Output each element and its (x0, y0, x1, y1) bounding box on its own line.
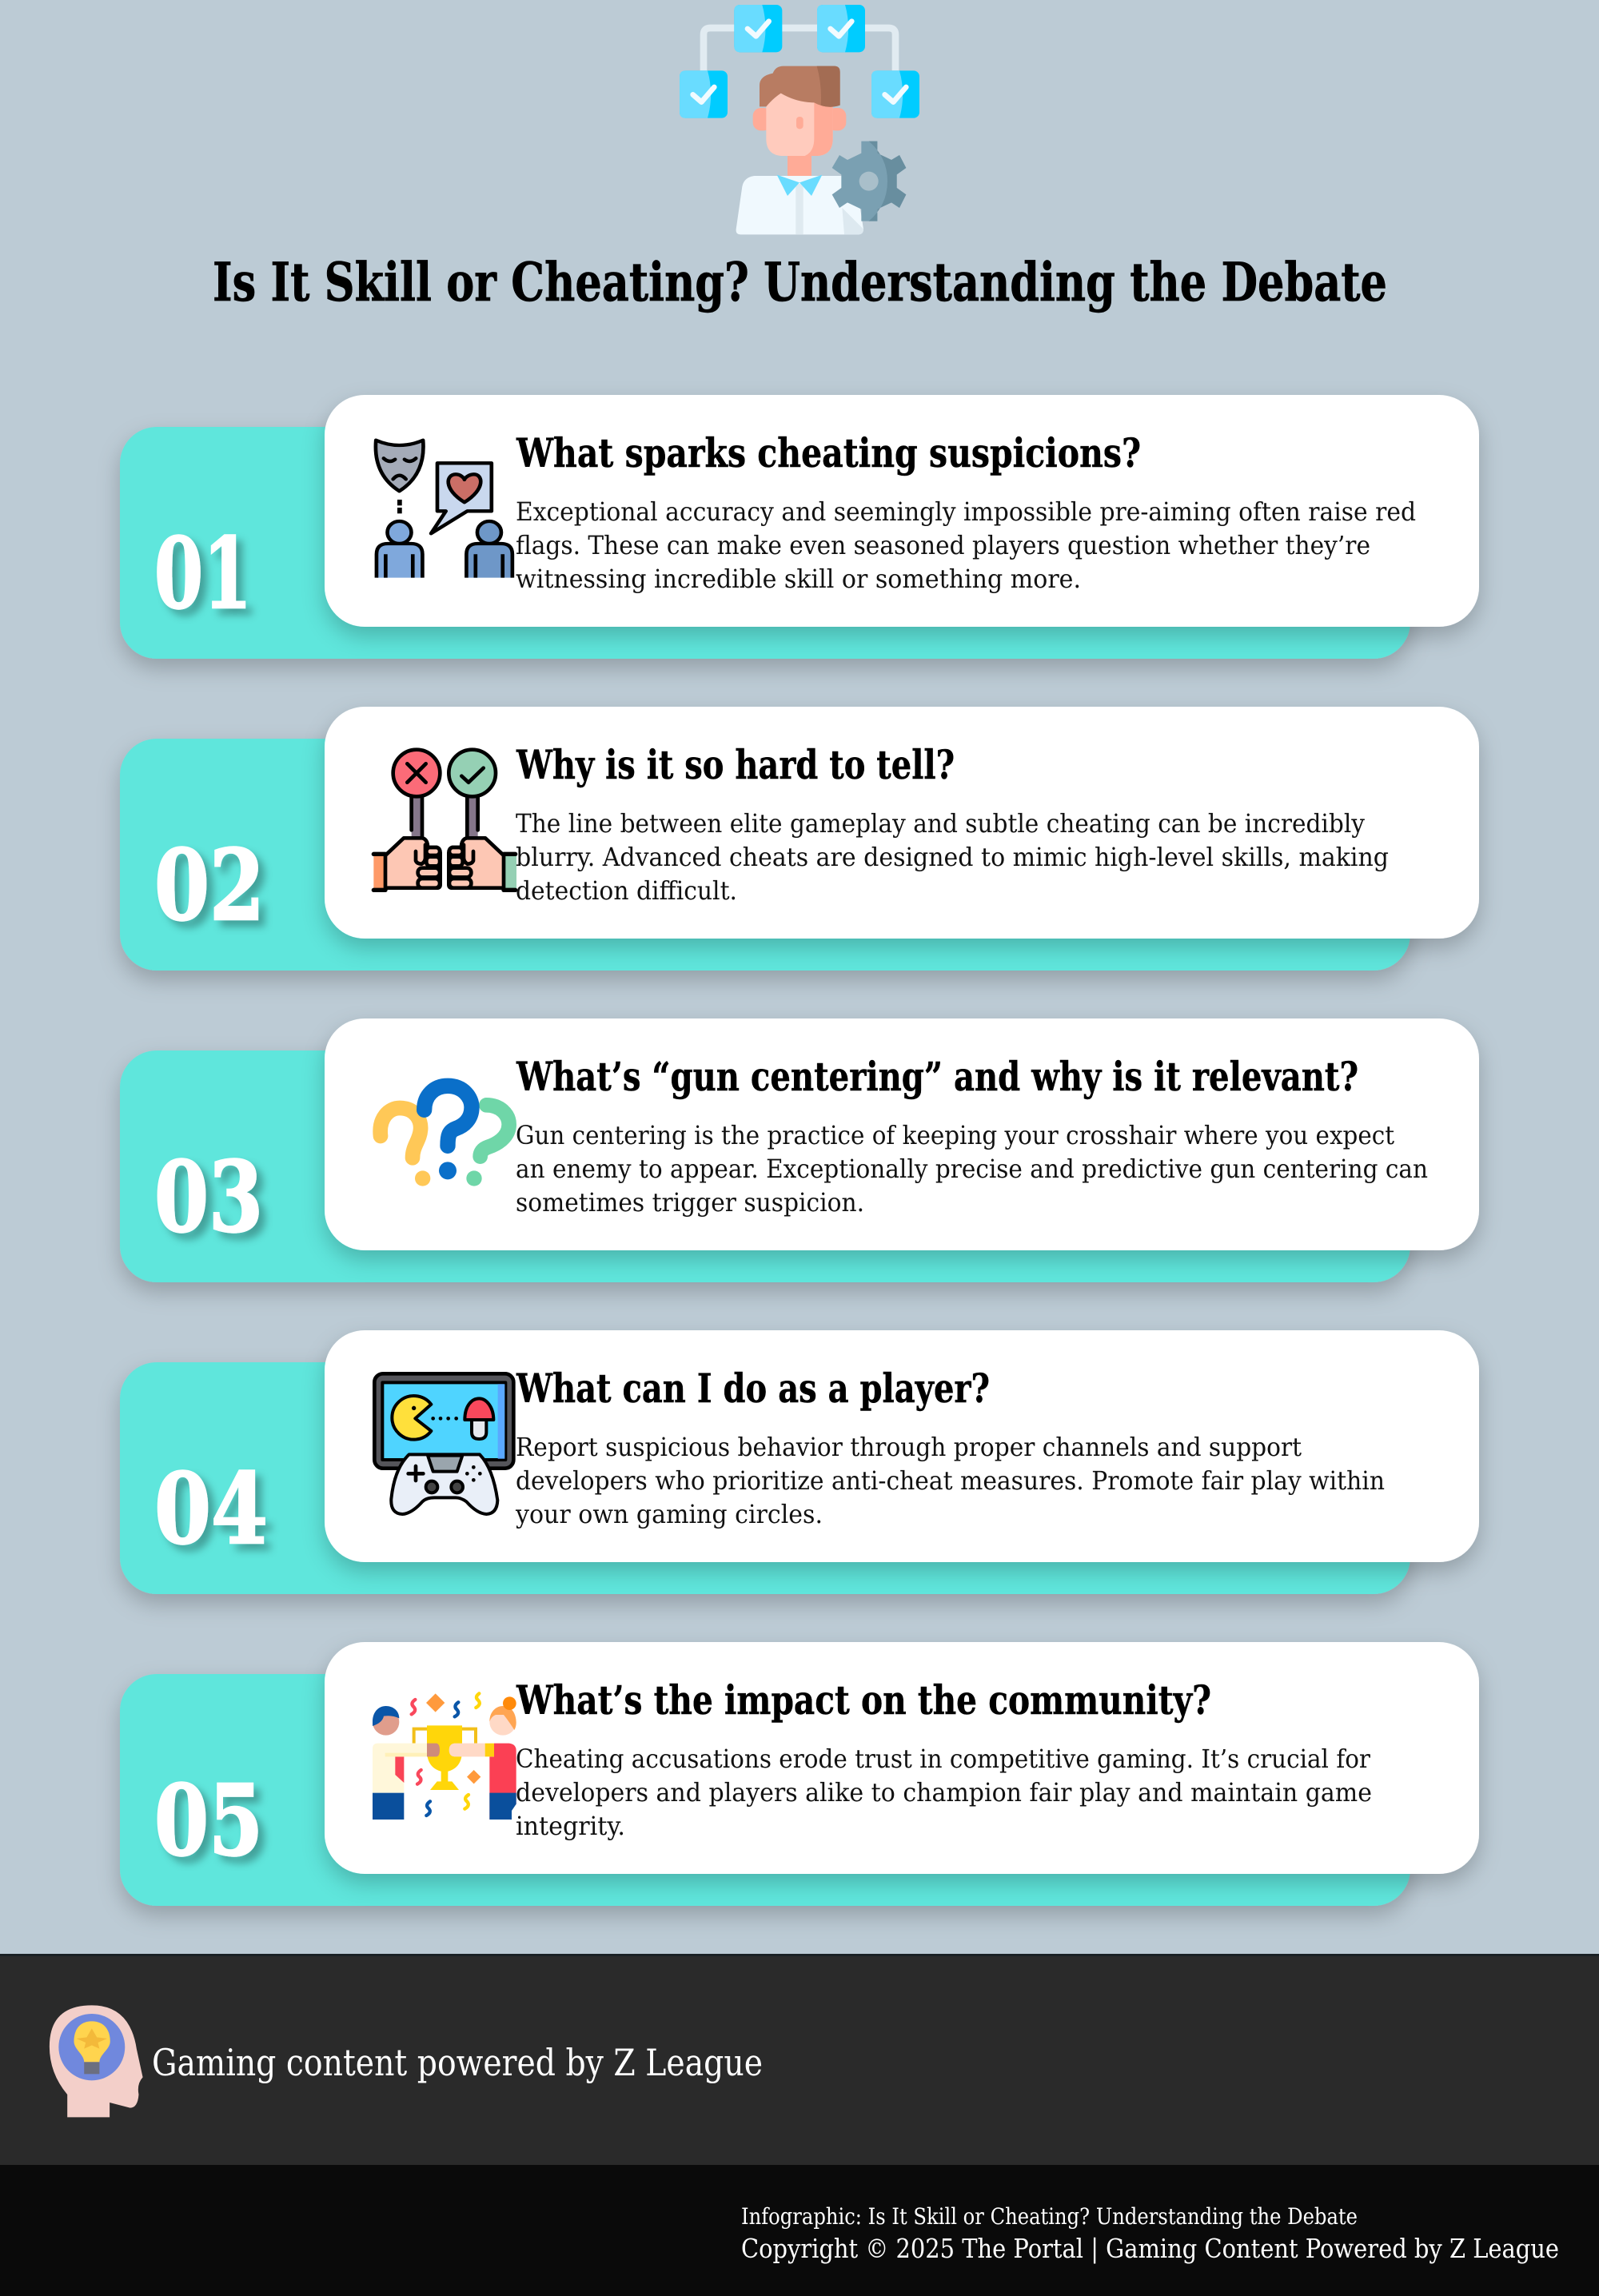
number band 01 (120, 427, 1410, 659)
infographic credit line: Infographic: Is It Skill or Cheating? Understanding the Debate (741, 2203, 1358, 2230)
content card 03 (325, 1018, 1479, 1250)
icon: head with light bulb (50, 2005, 143, 2117)
panel: powered-by footer band (0, 1954, 1599, 2165)
body text 05: Cheating accusations erode trust in competitive gaming. It’s crucial for (516, 1744, 1371, 1774)
number band 05 (120, 1674, 1410, 1906)
body text 01: Exceptional accuracy and seemingly impossible pre-aiming often raise red (516, 496, 1416, 527)
icon: question marks (381, 1086, 509, 1186)
body text 04: Report suspicious behavior through proper channels and support (516, 1432, 1302, 1462)
panel: 04 what can I do as a player (120, 1330, 1479, 1594)
content card 02 (325, 707, 1479, 939)
heading 05: What’s the impact on the community? (516, 1676, 1211, 1724)
number 04: 04 (154, 1451, 268, 1566)
panel: 05 impact on the community (120, 1642, 1479, 1906)
body text 03 (516, 1120, 1428, 1218)
panel: 01 what sparks cheating suspicions (120, 395, 1479, 659)
content card 04 (325, 1330, 1479, 1562)
icon: players sharing a trophy (373, 1693, 516, 1820)
content card 01 (325, 395, 1479, 627)
body text 01: flags. These can make even seasoned players question whether they’re (516, 530, 1370, 560)
body text 02: blurry. Advanced cheats are designed to mimic high-level skills, making (516, 842, 1389, 872)
number band 04 (120, 1362, 1410, 1594)
number 01: 01 (154, 516, 252, 631)
number band 02 (120, 739, 1410, 971)
number 02: 02 (154, 827, 265, 943)
heading 02: Why is it so hard to tell? (516, 741, 955, 788)
body text 05 (516, 1744, 1372, 1841)
body text 05: integrity. (516, 1811, 625, 1841)
footer tagline: Gaming content powered by Z League (152, 2041, 763, 2084)
number 03: 03 (154, 1139, 263, 1254)
panel: 02 why is it so hard to tell (120, 707, 1479, 971)
icon: game screen and controller (374, 1373, 513, 1514)
heading 03: What’s “gun centering” and why is it relevant? (516, 1053, 1358, 1100)
number 05: 05 (154, 1763, 263, 1878)
number band 03 (120, 1050, 1410, 1282)
body text 02: The line between elite gameplay and subtle cheating can be incredibly (516, 808, 1365, 839)
body text 03: an enemy to appear. Exceptionally precise and predictive gun centering can (516, 1154, 1428, 1184)
body text 01: witnessing incredible skill or something more. (516, 564, 1081, 594)
body text 05: developers and players alike to champion fair play and maintain game (516, 1777, 1372, 1808)
body text 02: detection difficult. (516, 875, 737, 906)
panel: 03 gun centering (120, 1018, 1479, 1282)
body text 04: your own gaming circles. (515, 1499, 823, 1529)
body text 04: developers who prioritize anti-cheat measures. Promote fair play within (516, 1465, 1385, 1496)
icon: hands holding yes and no signs (373, 750, 516, 890)
body text 03: sometimes trigger suspicion. (516, 1187, 864, 1218)
icon: person with checklist and gear (680, 5, 919, 234)
body text 03: Gun centering is the practice of keeping your crosshair where you expect (516, 1120, 1394, 1150)
body text 01 (516, 496, 1416, 594)
heading 04: What can I do as a player? (516, 1365, 990, 1412)
panel: copyright bar (0, 2165, 1599, 2296)
content card 05 (325, 1642, 1479, 1874)
body text 04 (515, 1432, 1385, 1529)
icon: masks and speech bubble (376, 440, 512, 578)
body text 02 (516, 808, 1389, 906)
heading 01: What sparks cheating suspicions? (516, 429, 1141, 476)
